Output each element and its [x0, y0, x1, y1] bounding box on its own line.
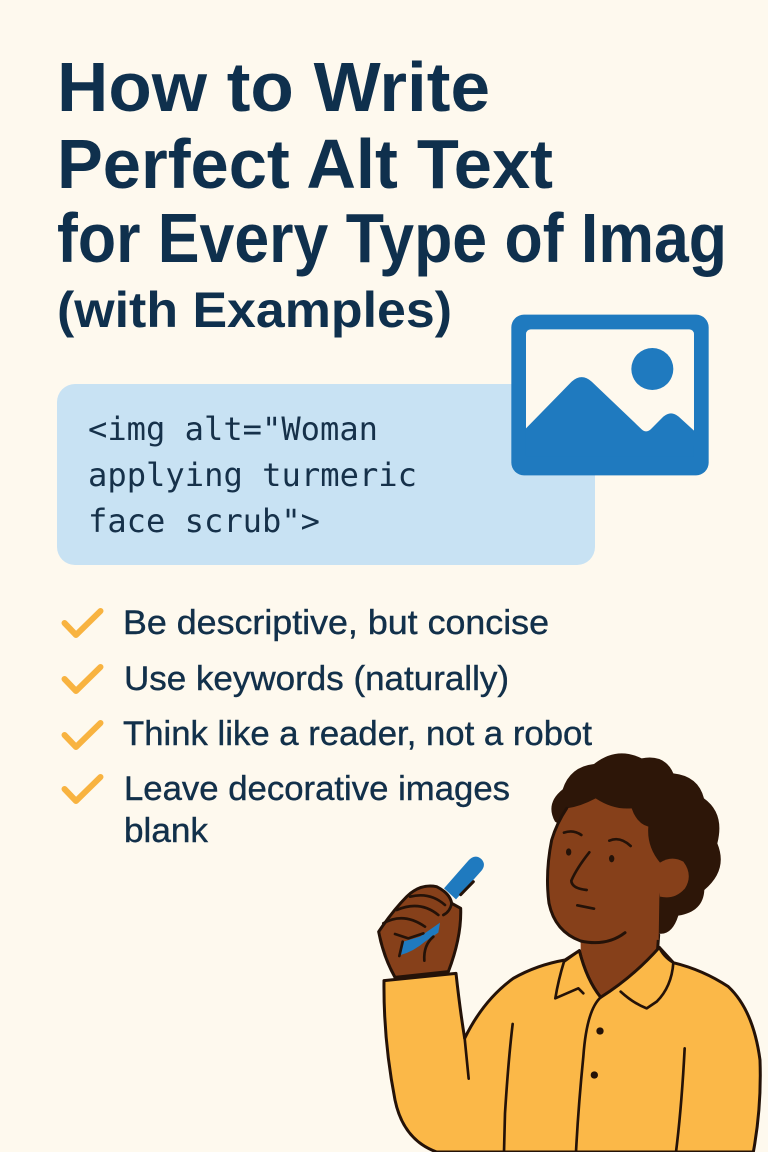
illustration: person holding a pen	[379, 753, 760, 1152]
checklist	[64, 604, 593, 850]
collar and shirt seams	[465, 947, 685, 1152]
pen in hand	[401, 923, 440, 955]
pen	[444, 857, 484, 899]
fingers	[383, 895, 452, 961]
code text: face scrub">	[88, 502, 320, 540]
shirt buttons	[591, 1027, 604, 1079]
icon: image placeholder	[511, 315, 709, 475]
check item 4: Leave decorative images	[124, 770, 510, 808]
code text: <img alt="Woman	[88, 410, 378, 448]
face outline	[547, 808, 625, 943]
eyes, brows, nose and mouth	[564, 831, 631, 909]
code panel	[57, 384, 595, 565]
title	[57, 48, 727, 338]
code text	[88, 410, 417, 540]
title: (with Examples)	[57, 282, 452, 338]
neck	[581, 897, 659, 997]
shirt	[384, 947, 760, 1152]
title: Perfect Alt Text	[57, 125, 553, 203]
ear	[660, 859, 689, 897]
code text: applying turmeric	[88, 456, 417, 494]
title: How to Write	[57, 48, 490, 126]
neck outline	[579, 935, 659, 997]
check item 4: blank	[124, 812, 209, 850]
check item 2: Use keywords (naturally)	[124, 660, 509, 698]
check item 1: Be descriptive, but concise	[123, 604, 549, 642]
hand	[379, 886, 461, 977]
face	[547, 798, 663, 943]
check item 3: Think like a reader, not a robot	[123, 715, 593, 753]
hair	[551, 753, 721, 934]
check item 4	[64, 770, 510, 850]
